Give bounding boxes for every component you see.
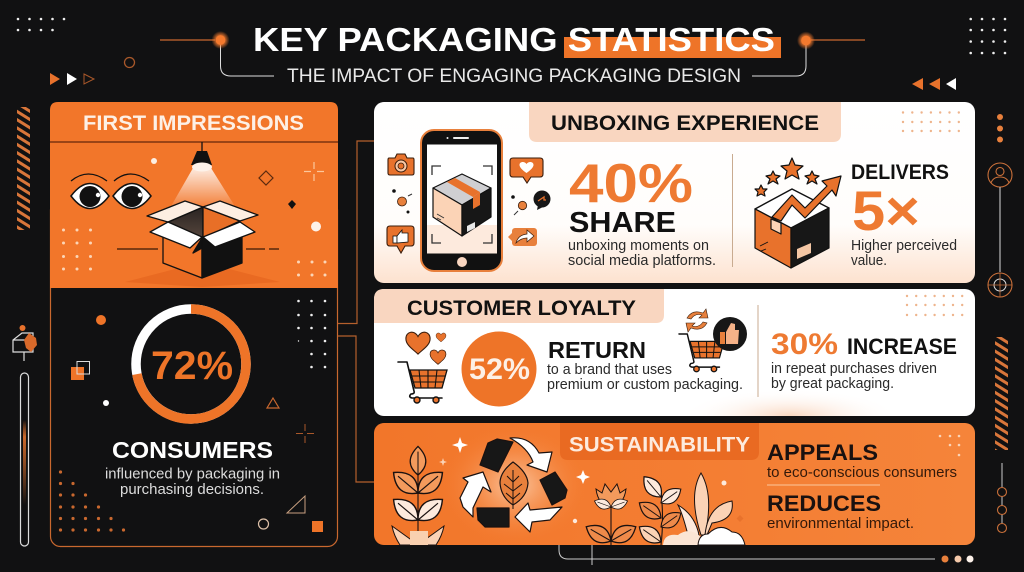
heading: FIRST IMPRESSIONS [83,112,304,135]
right side rail [988,114,1012,532]
triangles right [912,78,956,90]
heading tab [560,423,759,460]
description: social media platforms. [568,252,716,269]
dot grid [906,295,963,316]
dots [939,435,960,456]
label delivers: DELIVERS [851,161,949,184]
stat 52%: 52% [469,353,530,386]
sparkles [439,437,744,523]
description: Higher perceived [851,237,957,254]
label appeals: APPEALS [767,440,878,465]
icon: branch plant [635,472,685,548]
icon: social dots [511,195,527,215]
title block [160,21,865,87]
description: to eco-conscious consumers [767,464,957,481]
hatch stripe left [17,107,30,230]
description: influenced by packaging in [105,466,280,482]
corner decorations top [17,18,1006,90]
bottom connector [559,545,974,565]
stat 72%: 72% [151,344,233,388]
bottom glow [680,362,900,416]
title connector left [160,31,274,76]
icon: flower plant [582,484,640,548]
label reduces: REDUCES [767,491,881,516]
ground lines [117,248,279,250]
description: unboxing moments on [568,237,709,254]
phone [421,130,502,271]
panel: first impressions [50,102,338,546]
phone box [433,174,491,236]
icon: target [988,273,1012,297]
heading tab [374,289,664,323]
dot grids [62,228,326,276]
icon: share bubble [508,228,537,246]
floor shadow [125,262,280,287]
label increase: INCREASE [847,334,957,359]
eyes [71,174,151,208]
heading: UNBOXING EXPERIENCE [551,112,819,135]
panel: customer loyalty [374,289,975,416]
icon: tall leaves and clouds [663,473,745,545]
heading: CUSTOMER LOYALTY [407,297,636,320]
icon: heart bubble [510,158,543,183]
tube [20,373,28,546]
icon: person [988,163,1012,187]
description [568,237,716,269]
panel background [374,289,975,416]
recycle glow [440,425,590,545]
stat 30%: 30% [771,328,838,361]
dots top left [17,18,65,31]
title: KEY PACKAGING STATISTICS [253,21,775,58]
dots top right [969,18,1006,54]
mailbox icon [13,325,37,361]
description: to a brand that uses [547,361,672,378]
panel: sustainability [374,423,975,548]
label share: SHARE [569,207,676,239]
title connector right [752,32,865,76]
icon: dots left [392,189,412,214]
icon: recycle symbol [460,438,567,532]
node chain [998,463,1006,532]
stat 5x: 5× [852,179,920,242]
icon: message bubble [534,190,550,210]
label consumers: CONSUMERS [112,437,273,463]
heading: SUSTAINABILITY [569,434,750,456]
icon: plant left [388,446,448,545]
dots [997,114,1003,142]
subtitle: THE IMPACT OF ENGAGING PACKAGING DESIGN [287,65,741,87]
panel: unboxing experience [374,102,975,283]
description [771,360,937,392]
icon: camera [388,154,414,175]
heading tab [529,102,841,142]
illustration: spotlight box [62,142,326,287]
label return: RETURN [548,337,646,363]
connectors [338,141,374,482]
sparkle shapes [151,158,324,232]
description: value. [851,252,887,269]
icon: cart with thumbs up [679,309,747,372]
panel background [374,102,975,283]
left side rail [13,107,37,546]
lamp [191,142,212,172]
donut chart 72% [136,309,246,419]
icon: hearts [406,332,446,364]
description: in repeat purchases driven [771,360,937,377]
panel background [374,423,975,545]
open box [147,201,258,278]
decorative shapes lower panel [59,300,326,532]
panel dark body [50,200,338,546]
description [547,361,743,393]
icon: cart left [398,362,447,403]
dot grid [902,111,960,132]
beam [170,168,236,208]
hatch stripe right [995,337,1008,450]
panel orange top [50,102,338,288]
description [105,466,280,498]
title highlight [564,37,781,58]
icon: thumbs up bubble [387,226,414,253]
description: purchasing decisions. [120,481,264,498]
description [851,237,957,269]
circle 52% [462,332,536,406]
stat 40%: 40% [569,152,693,214]
icon: box with rising arrow and stars [755,158,841,268]
ring top left [124,58,134,68]
triangles left [50,73,94,85]
description: premium or custom packaging. [547,376,743,393]
description: by great packaging. [771,375,894,392]
description: environmental impact. [767,515,914,532]
